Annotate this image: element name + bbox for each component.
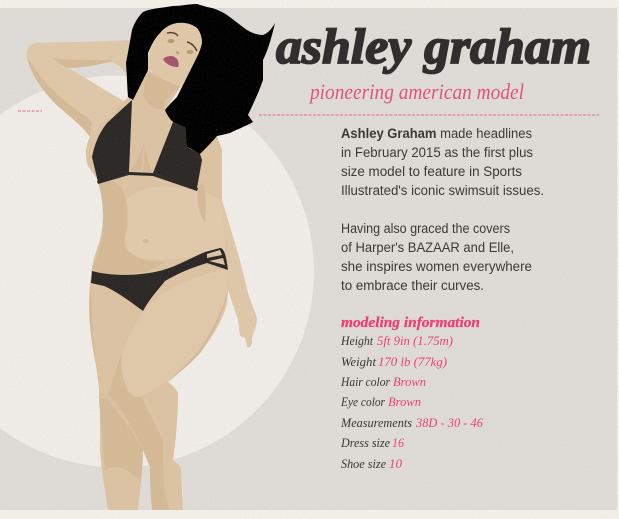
modeling information list: 16 (392, 436, 405, 450)
modeling information list: Brown (393, 375, 426, 389)
torso highlight (126, 187, 226, 260)
lips (163, 56, 179, 67)
biography paragraph 2: of Harper's BAZAAR and Elle, (341, 240, 514, 255)
eyebrows (167, 33, 197, 51)
skin shadows (89, 72, 206, 510)
eyes (168, 39, 174, 43)
thigh edge shadow (168, 290, 228, 382)
hanging arm and hand (200, 140, 257, 347)
modeling information list: Eye color (340, 395, 385, 409)
modeling information list: Dress size (340, 436, 390, 450)
modeling information list: Hair color (340, 375, 390, 389)
biography paragraph 1: Illustrated's iconic swimsuit issues. (341, 183, 544, 198)
figure: Ashley Graham illustration (27, 4, 275, 510)
modeling information list: Measurements (340, 416, 412, 430)
hair (126, 4, 275, 154)
bikini top (92, 100, 202, 191)
biography paragraph 1: size model to feature in Sports (341, 164, 522, 179)
modeling information list: 38D - 30 - 46 (415, 416, 484, 430)
face (148, 22, 203, 86)
modeling information list: Shoe size (341, 457, 386, 471)
modeling information list: Brown (388, 395, 421, 409)
modeling information list (340, 334, 484, 471)
background circle (0, 75, 314, 467)
dashed divider (259, 114, 599, 116)
raised arm (27, 40, 132, 137)
modeling information list: Weight (341, 355, 377, 369)
modeling information list: 170 lb (77kg) (378, 355, 447, 369)
torso and legs (86, 70, 228, 510)
biography paragraph 1: in February 2015 as the first plus (341, 145, 533, 160)
subtitle: pioneering american model (308, 79, 524, 104)
biography paragraph 2 (341, 221, 532, 293)
biography paragraph 2: to embrace their curves. (341, 278, 484, 293)
biography paragraph 2: she inspires women everywhere (341, 259, 532, 274)
title: ashley graham (276, 18, 591, 74)
left dashed accent (18, 110, 42, 112)
modeling information heading: modeling information (341, 315, 480, 331)
front thigh (121, 268, 228, 397)
modeling information list: 5ft 9in (1.75m) (377, 334, 453, 348)
biography paragraph 1: Ashley Graham made headlines (341, 126, 532, 141)
nose (176, 52, 179, 53)
arm shadows (27, 57, 113, 137)
biography paragraph 1 (341, 126, 544, 198)
biography paragraph 2: Having also graced the covers (341, 221, 510, 236)
modeling information list: Height (340, 334, 373, 348)
bikini bottom (91, 248, 228, 311)
navel (143, 239, 149, 243)
modeling information list: 10 (389, 457, 403, 471)
